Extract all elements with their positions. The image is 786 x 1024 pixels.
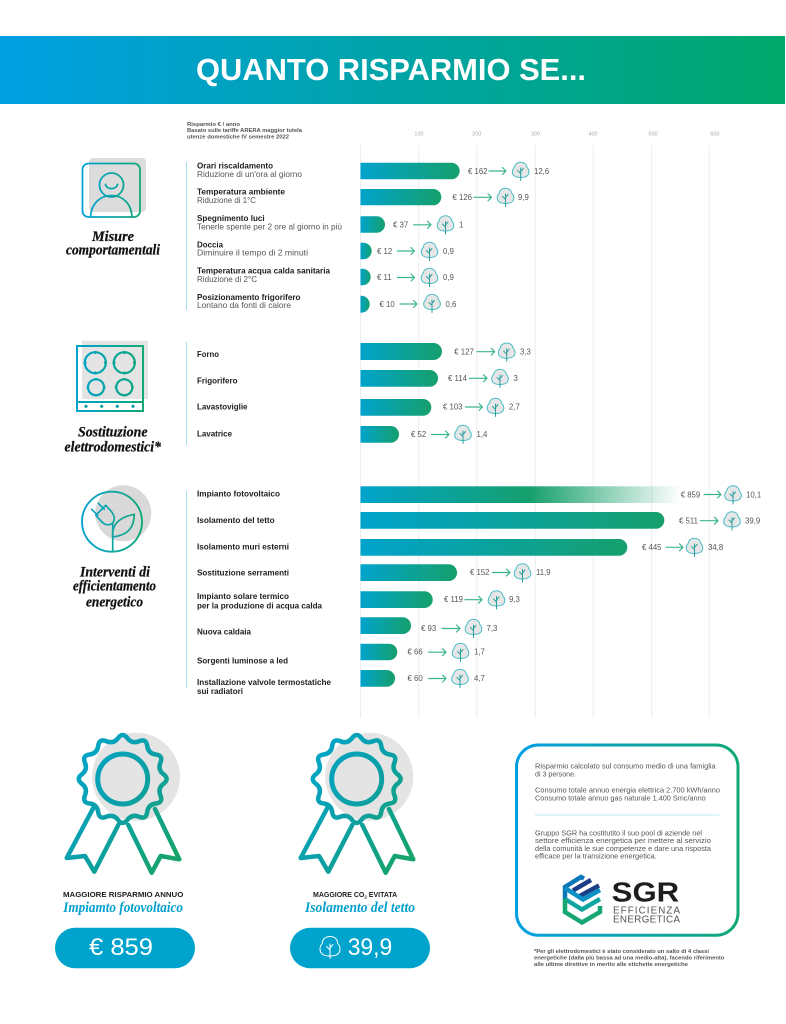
badge text: maggiore co2 evitata: 2 [364, 894, 367, 900]
info text: consumption: Risparmio calcolato sul consumo medio di una famiglia [535, 761, 717, 770]
title: QUANTO RISPARMIO SE... [196, 52, 586, 87]
info text: consumption: Consumo totale annuo energia elettrica 2.700 kWh/anno [535, 785, 720, 794]
bars: interventi di efficientamento: 11,9 [536, 568, 551, 577]
logo: sgr: EFFICIENZA [613, 905, 680, 916]
labels: interventi di efficientamento: Installazione valvole termostatiche [197, 677, 331, 687]
bars: interventi di efficientamento: € 66 [408, 648, 423, 656]
icon: hob [77, 341, 148, 411]
heading: sostituzione elettrodomestici [64, 425, 161, 456]
labels: misure comportamentali: Riduzione di 2°C [197, 274, 257, 284]
pill: 859 euro [55, 928, 195, 968]
bars: interventi di efficientamento: € 445 [642, 543, 662, 552]
bars: sostituzione elettrodomestici: € 114 [448, 374, 468, 383]
badge: maggiore co2 evitata [301, 733, 413, 873]
labels: misure comportamentali: Riduzione di 1°C [197, 195, 256, 205]
icon: person [82, 158, 146, 217]
badge text: maggiore co2 evitata: EVITATA [367, 892, 397, 899]
bars: interventi di efficientamento [360, 486, 761, 688]
footnote: *Per gli elettrodomestici è stato considerato un salto di 4 classi [534, 949, 709, 955]
labels: interventi di efficientamento: Isolamento muri esterni [197, 542, 289, 552]
labels: interventi di efficientamento: Impianto fotovoltaico [197, 489, 280, 499]
bars: sostituzione elettrodomestici: 3 [514, 374, 518, 383]
info text: gruppo sgr: Gruppo SGR ha costitutito il suo pool di aziende nel [535, 828, 702, 837]
info text: consumption: Consumo totale annuo gas naturale 1.400 Smc/anno [535, 793, 706, 802]
icon: plug and leaf [82, 485, 151, 552]
chart axis: 400 [588, 132, 598, 138]
bars: misure comportamentali: 12,6 [534, 167, 549, 176]
info panel [516, 745, 738, 935]
labels: misure comportamentali: Diminuire il tempo di 2 minuti [197, 248, 308, 258]
chart axis: 300 [531, 132, 540, 138]
bars: interventi di efficientamento: € 119 [444, 595, 463, 604]
labels: misure comportamentali [186, 160, 342, 310]
bars: interventi di efficientamento: 7,3 [486, 624, 497, 633]
labels: interventi di efficientamento: Sostituzione serramenti [197, 568, 289, 578]
bars: misure comportamentali: € 162 [468, 167, 488, 176]
badge text: maggiore co2 evitata: MAGGIORE CO [313, 892, 364, 899]
badge text: maggiore risparmio: MAGGIORE RISPARMIO ANNUO [63, 892, 184, 899]
labels: sostituzione elettrodomestici: Frigorifero [197, 376, 238, 386]
bars: sostituzione elettrodomestici: € 127 [454, 348, 474, 356]
labels: misure comportamentali: Lontano da fonti di calore [197, 300, 291, 310]
bars: sostituzione elettrodomestici: € 103 [443, 402, 463, 412]
header band [0, 36, 785, 104]
heading: interventi di efficientamento energetico: Interventi di [79, 565, 151, 581]
heading: misure comportamentali: Misure [91, 229, 134, 245]
footnote: alle ultime direttive in merito alle etichette energetiche [534, 962, 689, 968]
logo: sgr: SGR [612, 877, 679, 908]
bars: sostituzione elettrodomestici: € 52 [411, 430, 426, 439]
bars: sostituzione elettrodomestici: 3,3 [520, 348, 531, 356]
labels: misure comportamentali: Temperatura ambiente [197, 186, 285, 196]
labels: misure comportamentali: Posizionamento frigorifero [197, 292, 300, 302]
bars: misure comportamentali: 1 [459, 220, 463, 230]
info text: consumption [535, 761, 720, 802]
badge text: maggiore co2 evitata [304, 892, 415, 916]
labels: sostituzione elettrodomestici: Forno [197, 349, 219, 359]
heading: misure comportamentali: comportamentali [66, 242, 161, 258]
bars: misure comportamentali: € 12 [377, 247, 392, 256]
chart axis: 200 [472, 132, 481, 138]
heading: misure comportamentali [66, 229, 161, 258]
info text: gruppo sgr [535, 828, 712, 861]
bars: interventi di efficientamento: € 859 [681, 490, 700, 500]
labels: misure comportamentali: Doccia [197, 240, 223, 250]
pill: 39,9 [290, 928, 430, 968]
bars: interventi di efficientamento: 34,8 [708, 543, 723, 552]
heading: sostituzione elettrodomestici: Sostituzione [78, 425, 148, 441]
bars: interventi di efficientamento: € 60 [408, 674, 423, 683]
chart note: utenze domestiche IV semestre 2022 [187, 134, 289, 140]
bars: sostituzione elettrodomestici: 1,4 [476, 430, 488, 439]
bars: misure comportamentali: € 10 [380, 300, 395, 309]
labels: misure comportamentali: Riduzione di un'ora al giorno [197, 169, 302, 179]
chart note: Risparmio € / anno [187, 122, 241, 128]
labels: misure comportamentali: Tenerle spente per 2 ore al giorno in più [197, 222, 342, 232]
chart note [187, 122, 303, 140]
chart axis [360, 132, 720, 718]
chart note: Basato sulle tariffe ARERA maggior tutela [187, 128, 303, 134]
heading: interventi di efficientamento energetico [73, 565, 156, 611]
footnote [534, 949, 725, 968]
labels: interventi di efficientamento: Isolamento del tetto [197, 515, 275, 525]
labels: sostituzione elettrodomestici: Lavastoviglie [197, 402, 248, 412]
bars: misure comportamentali: 0,6 [446, 300, 456, 309]
chart axis: 100 [414, 132, 424, 138]
labels: interventi di efficientamento: per la produzione di acqua calda [197, 600, 322, 610]
bars: misure comportamentali: € 11 [377, 273, 392, 282]
bars: interventi di efficientamento: 9,3 [509, 595, 520, 604]
badge: maggiore risparmio [67, 733, 180, 873]
info text: gruppo sgr: settore efficienza energetica per mettere al servizio [535, 836, 711, 845]
heading: sostituzione elettrodomestici: elettrodomestici* [64, 440, 161, 456]
heading: interventi di efficientamento energetico: energetico [86, 595, 143, 611]
labels: interventi di efficientamento: Nuova caldaia [197, 626, 251, 636]
bars: misure comportamentali: 0,9 [443, 247, 454, 256]
bars: interventi di efficientamento: € 152 [470, 568, 490, 577]
chart axis: 500 [648, 132, 658, 138]
info text: gruppo sgr: efficace per la transizione energetica. [535, 852, 657, 861]
bars: interventi di efficientamento: € 93 [421, 624, 436, 633]
labels: misure comportamentali: Temperatura acqua calda sanitaria [197, 266, 330, 276]
heading: interventi di efficientamento energetico: efficientamento [73, 579, 156, 595]
bars: sostituzione elettrodomestici: 2,7 [509, 402, 520, 412]
labels: sostituzione elettrodomestici [186, 342, 248, 445]
footnote: energetiche (dalla più bassa ad una medio-alta), facendo riferimento [534, 956, 725, 962]
bars: misure comportamentali: 9,9 [518, 193, 529, 202]
bars: interventi di efficientamento: 1,7 [474, 648, 485, 656]
bars: misure comportamentali: 0,9 [443, 273, 454, 282]
bars: interventi di efficientamento: 39,9 [745, 516, 760, 526]
bars: misure comportamentali: € 126 [452, 193, 472, 202]
labels: interventi di efficientamento: sui radiatori [197, 686, 243, 696]
info text: gruppo sgr: della comunità le sue competenze e dare una risposta [535, 844, 712, 853]
labels: sostituzione elettrodomestici: Lavatrice [197, 428, 232, 438]
info text: consumption: di 3 persone. [535, 769, 576, 778]
bars: interventi di efficientamento: 10,1 [746, 490, 761, 500]
pill: 859 euro: € 859 [89, 934, 153, 961]
pill: 39,9: 39,9 [348, 934, 392, 961]
bars: misure comportamentali [360, 162, 549, 313]
labels: interventi di efficientamento: Impianto solare termico [197, 591, 289, 601]
bars: interventi di efficientamento: 4,7 [474, 674, 485, 683]
bars: sostituzione elettrodomestici [360, 343, 531, 444]
labels: interventi di efficientamento: Sorgenti luminose a led [197, 655, 288, 665]
labels: interventi di efficientamento [186, 489, 331, 696]
badge text: maggiore risparmio: Impiamto fotovoltaico [62, 900, 183, 916]
logo: sgr: ENERGETICA [613, 915, 680, 926]
logo: sgr [565, 877, 680, 926]
labels: misure comportamentali: Orari riscaldamento [197, 160, 273, 170]
bars: interventi di efficientamento: € 511 [679, 516, 698, 526]
badge text: maggiore co2 evitata: Isolamento del tetto [304, 900, 415, 916]
chart axis: 600 [710, 132, 720, 138]
badge text: maggiore risparmio [62, 892, 184, 916]
bars: misure comportamentali: € 37 [393, 220, 408, 230]
labels: misure comportamentali: Spegnimento luci [197, 213, 265, 223]
